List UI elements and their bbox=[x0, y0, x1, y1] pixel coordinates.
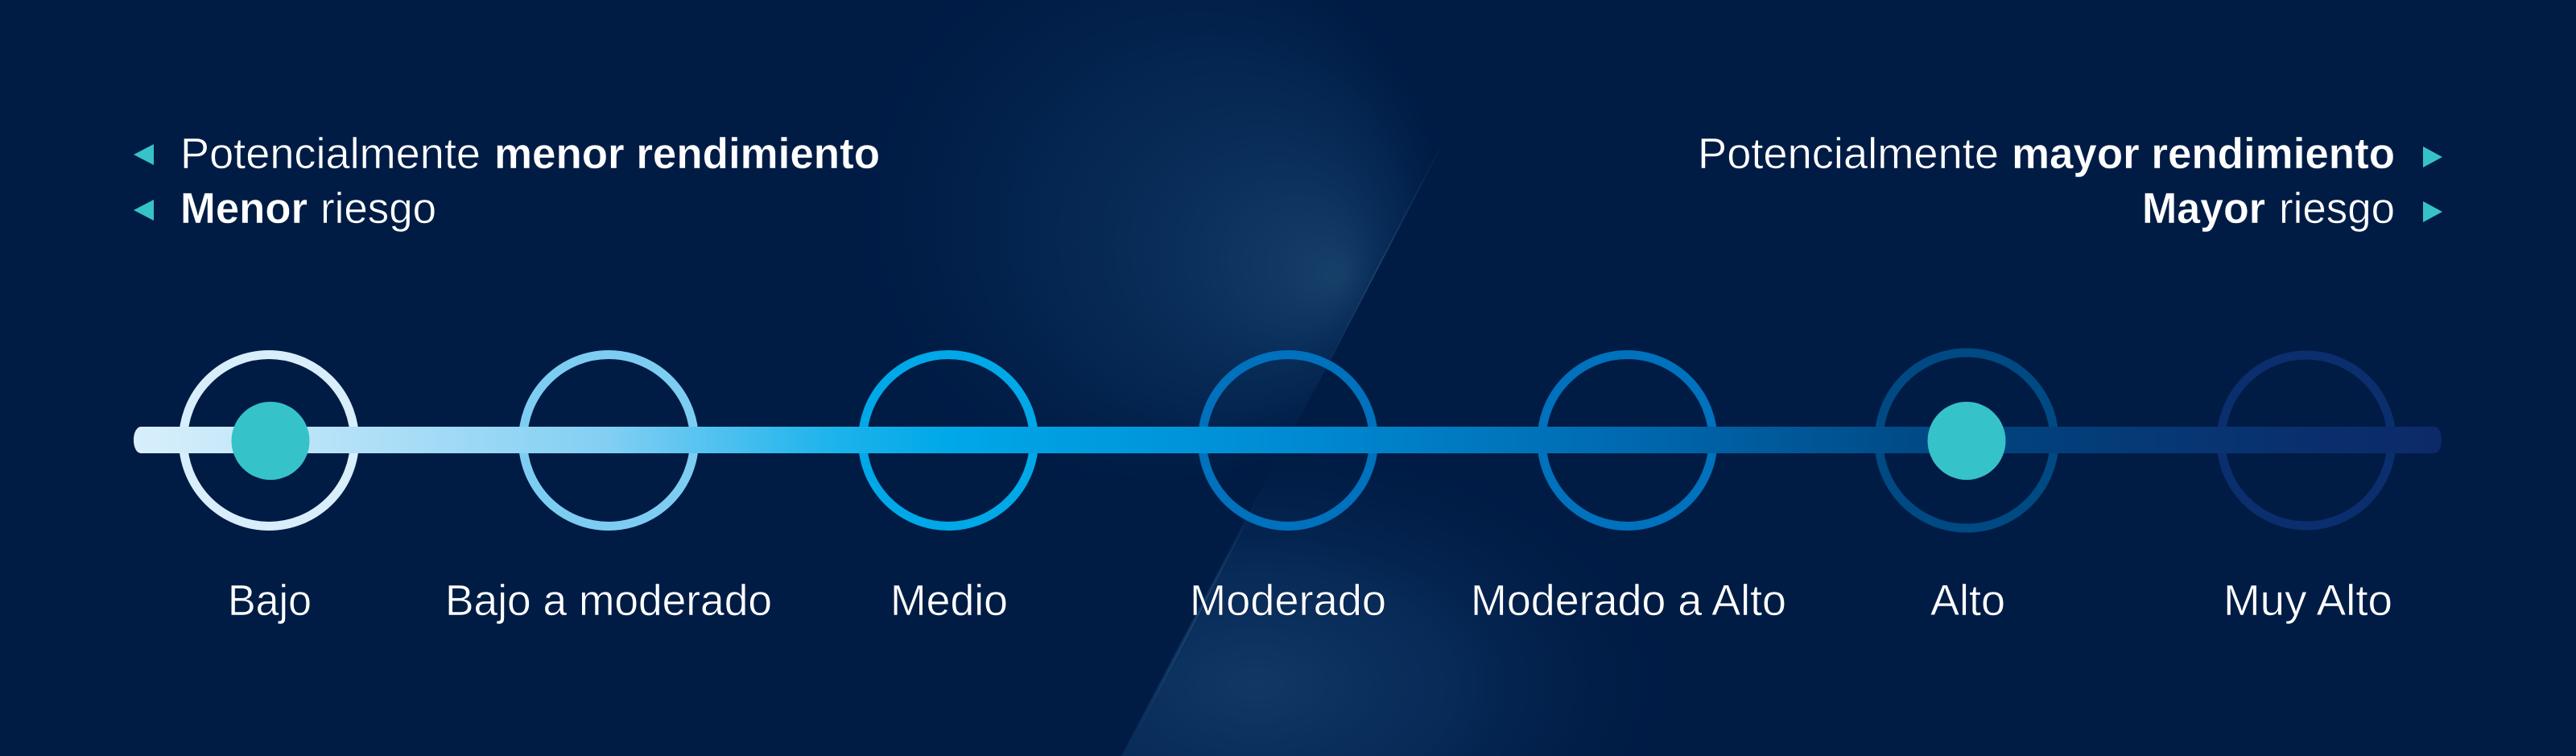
legend: higher return and higher risk bbox=[1698, 130, 2442, 233]
risk scale bbox=[134, 353, 2442, 528]
label: Bajo: Bajo bbox=[228, 576, 312, 625]
label: Moderado a Alto: Moderado a Alto bbox=[1471, 576, 1786, 625]
diagonal light edge bbox=[1132, 137, 1446, 742]
arrow: left, lower risk bbox=[134, 200, 154, 221]
ring: Muy Alto bbox=[2221, 355, 2392, 526]
background glow: upper diagonal light bbox=[1003, 34, 1411, 423]
text: lower risk: riesgo bbox=[320, 184, 436, 233]
marker dot: Alto bbox=[1927, 402, 2006, 480]
text: potentially higher return: Potencialmente bbox=[1698, 130, 1999, 178]
arrow: right, higher risk bbox=[2423, 201, 2442, 222]
text: lower risk bbox=[180, 184, 436, 233]
text: lower risk: Menor bbox=[180, 184, 308, 233]
ring: Medio bbox=[863, 354, 1034, 527]
scale labels bbox=[228, 576, 2392, 625]
text: potentially higher return bbox=[1698, 130, 2395, 178]
text: potentially lower return: menor rendimiento bbox=[494, 130, 880, 178]
ring: Bajo bbox=[184, 354, 354, 527]
background glow: lower diagonal light bbox=[1121, 521, 1532, 756]
legend: lower return and lower risk bbox=[134, 130, 880, 233]
arrow: right, higher return bbox=[2423, 147, 2442, 167]
arrow: left, lower return bbox=[134, 144, 154, 165]
label: Muy Alto: Muy Alto bbox=[2223, 576, 2392, 625]
text: higher risk bbox=[2142, 184, 2395, 233]
marker dot: Bajo bbox=[232, 402, 309, 480]
text: potentially higher return: mayor rendimiento bbox=[2012, 130, 2395, 178]
text: potentially lower return bbox=[180, 130, 880, 178]
label: Bajo a moderado: Bajo a moderado bbox=[445, 576, 772, 625]
ring: Moderado bbox=[1203, 354, 1373, 527]
label: Alto: Alto bbox=[1930, 576, 2005, 625]
ring: Alto bbox=[1879, 353, 2054, 528]
text: higher risk: Mayor bbox=[2142, 184, 2265, 233]
label: Medio: Medio bbox=[890, 576, 1008, 625]
label: Moderado: Moderado bbox=[1190, 576, 1386, 625]
text: higher risk: riesgo bbox=[2279, 184, 2395, 233]
ring: Moderado a Alto bbox=[1542, 354, 1713, 527]
text: potentially lower return: Potencialmente bbox=[180, 130, 481, 178]
ring: Bajo a moderado bbox=[523, 354, 694, 527]
gradient bar bbox=[134, 427, 2442, 453]
